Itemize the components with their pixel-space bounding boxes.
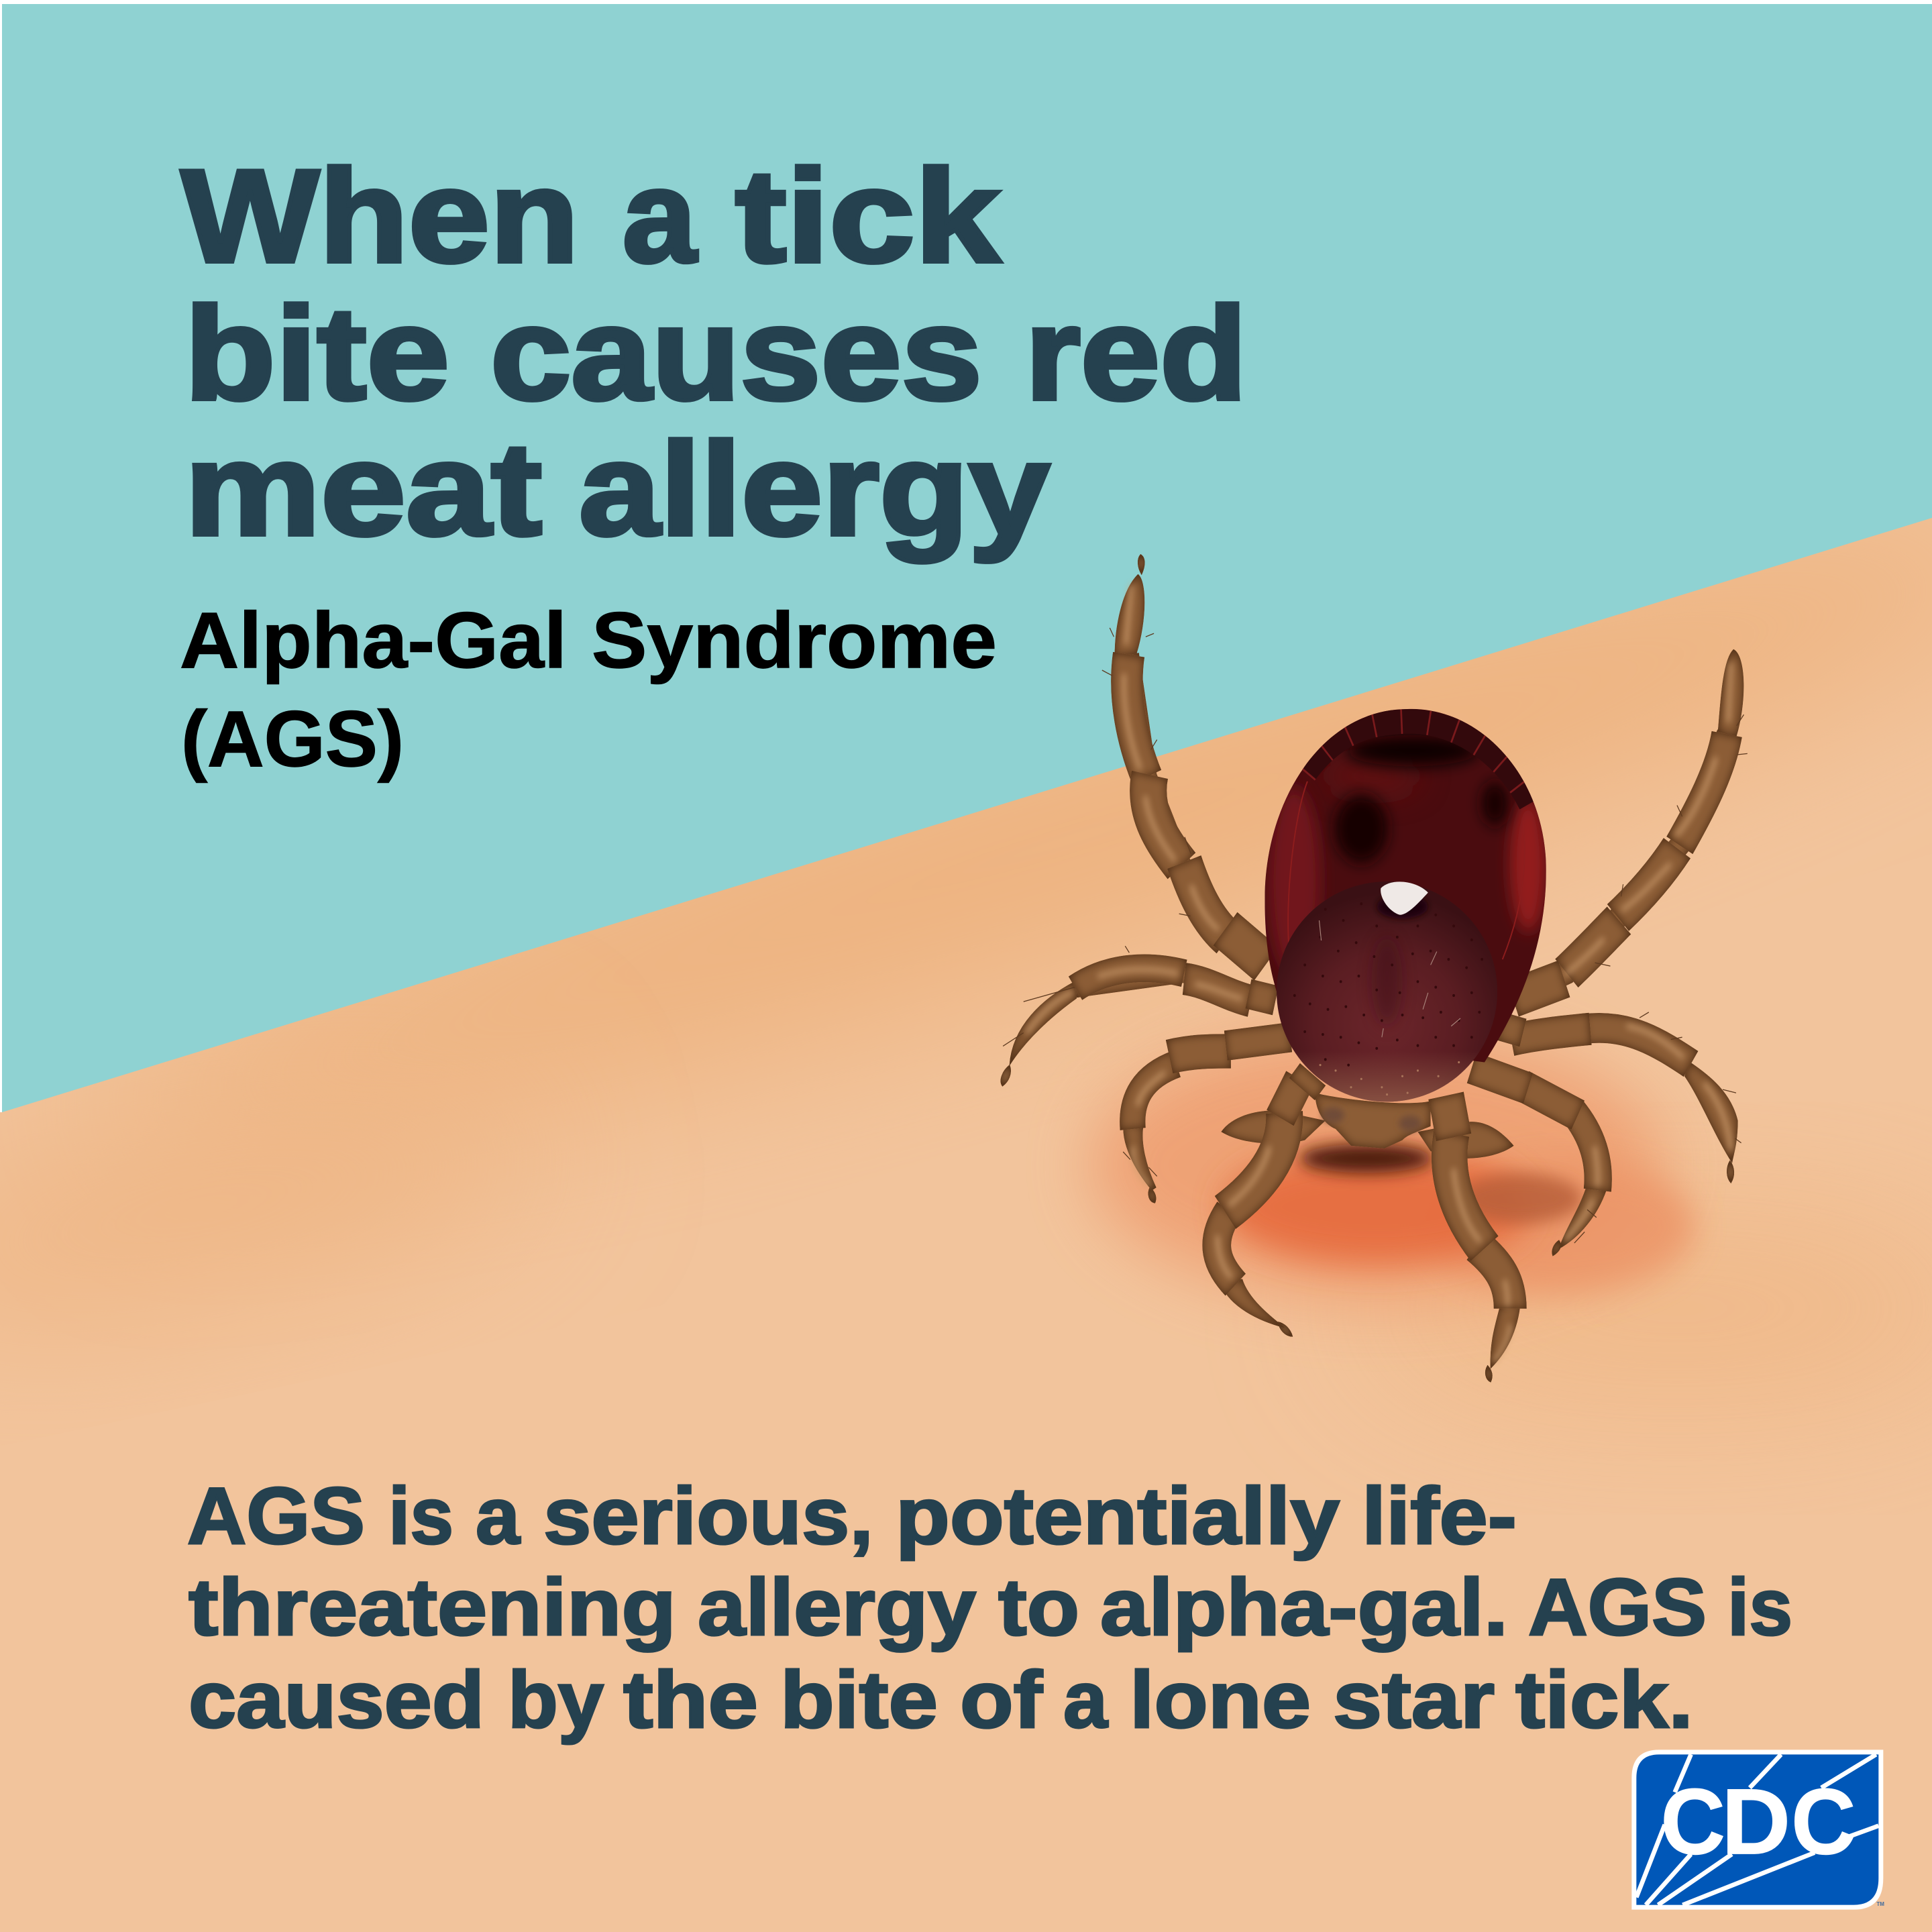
subtitle (180, 596, 997, 784)
body text: serious, (543, 1471, 873, 1561)
body text: lone (1130, 1655, 1311, 1745)
leg: left middle (1001, 968, 1275, 1086)
subtitle: Alpha-Gal (180, 596, 567, 685)
body text: to (998, 1562, 1079, 1652)
title: tick (735, 142, 1000, 290)
title: meat (184, 415, 542, 563)
title: bite (184, 280, 449, 427)
shield rim festoons (1306, 721, 1529, 804)
tick shield (scutum) (1265, 708, 1546, 1063)
logo white frame (1631, 1750, 1883, 1910)
body text: the (623, 1655, 758, 1745)
body text: threatening (189, 1562, 676, 1652)
body text: a (476, 1471, 521, 1561)
title: When (181, 142, 579, 290)
white left margin (0, 0, 2, 1112)
subtitle: (AGS) (181, 695, 404, 784)
body text: a (1063, 1655, 1108, 1745)
skin panel (0, 402, 1932, 1932)
body text: life- (1362, 1471, 1517, 1561)
body text: of (960, 1655, 1043, 1745)
body text: star (1333, 1655, 1495, 1745)
white spot on shield (1381, 881, 1428, 915)
body text: AGS (1528, 1562, 1707, 1652)
leg: front left (1217, 1071, 1320, 1336)
CDC logo (1631, 1750, 1884, 1910)
body text: caused (189, 1655, 484, 1745)
logo rays (1636, 1754, 1878, 1905)
tick illustration (1001, 555, 1748, 1382)
body text: is (1727, 1562, 1792, 1652)
body text: tick. (1515, 1655, 1693, 1745)
title: causes (490, 280, 982, 427)
body text (187, 1471, 1792, 1745)
body text: alpha-gal. (1100, 1562, 1508, 1652)
logo letters: D (1721, 1769, 1790, 1874)
body text: is (388, 1471, 453, 1561)
leg: front right (1446, 1095, 1521, 1382)
body text: by (508, 1655, 604, 1745)
leg: right lower (1472, 1068, 1606, 1256)
title (181, 142, 1247, 563)
tick head (capitulum) (1315, 1093, 1431, 1148)
body text: AGS (187, 1471, 365, 1561)
leg: left lower (1124, 1037, 1291, 1203)
title: red (1025, 280, 1247, 427)
leg: right middle (1500, 1026, 1737, 1183)
leg highlights and hairs (1003, 587, 1748, 1360)
skin redness around bite (1089, 1032, 1695, 1299)
subtitle: Syndrome (592, 596, 997, 685)
logo letters: C (1660, 1769, 1725, 1874)
title: allergy (579, 415, 1050, 563)
body text: bite (780, 1655, 938, 1745)
trademark: TM (1876, 1901, 1884, 1907)
body text: allergy (698, 1562, 976, 1652)
title: a (623, 142, 697, 290)
tick abdomen (1277, 881, 1497, 1102)
logo letters (1660, 1769, 1856, 1874)
mouthpart palps (1221, 1110, 1514, 1159)
leg: raised left (1115, 555, 1267, 964)
leg: raised right (1513, 649, 1743, 998)
teal background panel (2, 4, 1932, 1112)
logo letters: C (1791, 1769, 1856, 1874)
body text: potentially (896, 1471, 1340, 1561)
abdomen speckles (1295, 904, 1482, 1065)
logo blue field (1636, 1754, 1878, 1905)
